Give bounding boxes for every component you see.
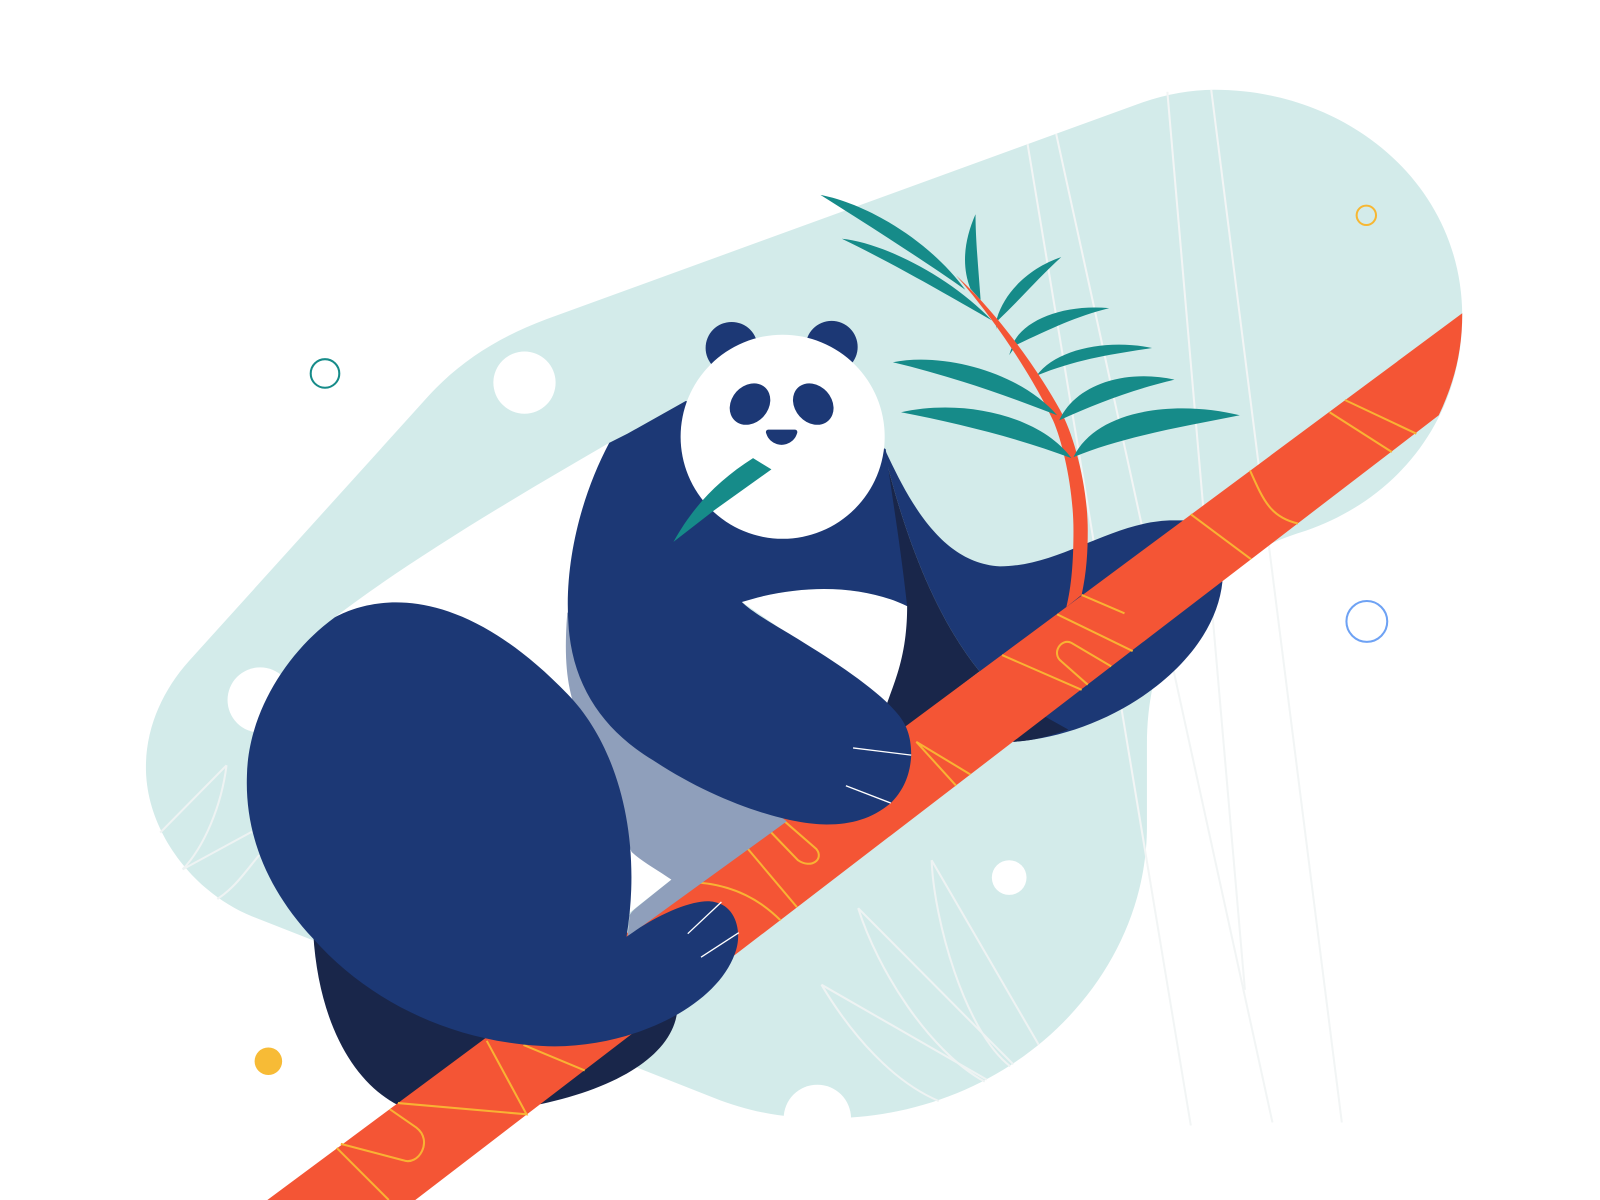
faint leaf outlines lower centre [821,860,1039,1101]
outlined and solid accent circles [255,206,1387,1075]
faint leaf outlines lower left [160,765,259,899]
hand claws [846,748,911,803]
panda torso and left arm [568,401,911,824]
background blob [146,90,1462,1118]
leaf in mouth [673,458,771,542]
right arm [884,447,1222,742]
foot claws [688,902,739,957]
white dots [228,352,1027,1159]
front leg [247,602,738,1046]
faint vertical bamboo lines [1028,90,1342,1126]
branch markings [337,400,1416,1200]
panda head [681,335,885,539]
back leg shadow [313,918,678,1105]
grey belly shadow [566,612,787,937]
panda ears [706,321,858,374]
white belly [742,589,913,709]
arm shadow [878,449,1068,742]
bamboo stem and leaves [820,195,1240,607]
white area behind panda [335,443,671,918]
panda eyes [721,375,842,433]
panda nose [766,430,797,445]
branch [267,313,1462,1200]
